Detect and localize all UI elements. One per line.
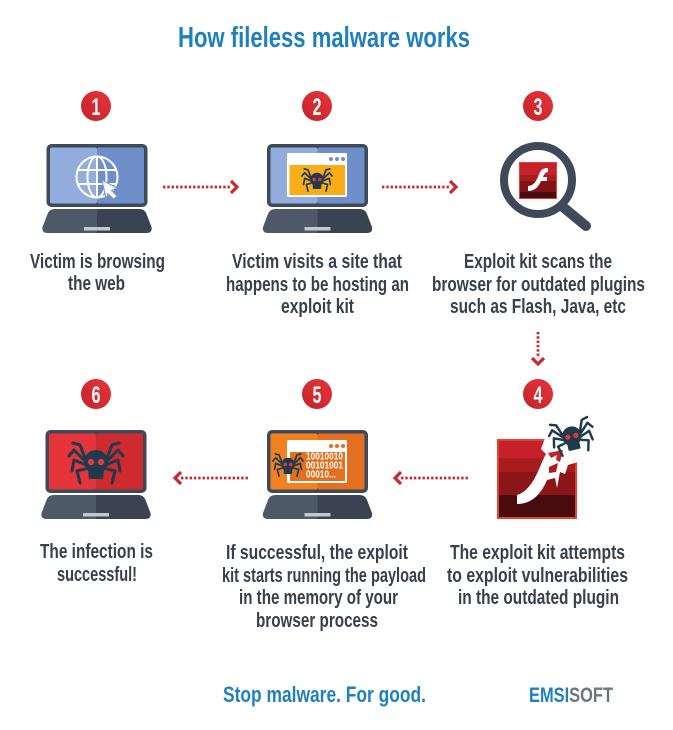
text: step 5: kit starts running the payload	[222, 565, 426, 587]
step 1 badge: 1	[92, 94, 100, 121]
step 2 badge: 2	[312, 94, 322, 121]
logo: Emsisoft: EMSISOFT	[529, 684, 613, 707]
step 5 badge: 5	[312, 382, 322, 409]
icon: laptop running payload: 10010010	[306, 452, 343, 462]
text: step 5: If successful, the exploit	[226, 542, 408, 564]
step 3 badge	[523, 91, 553, 121]
step 2 badge	[302, 91, 332, 121]
text: step 6: successful!	[57, 564, 137, 586]
text: step 1: Victim is browsing	[30, 251, 165, 273]
text: step 1	[30, 251, 165, 295]
arrow 1 to 2	[163, 181, 237, 193]
text: step 2: exploit kit	[281, 296, 354, 318]
text: step 3	[432, 251, 645, 318]
text: step 5: in the memory of your	[239, 587, 398, 609]
icon: laptop running payload: 00010...	[306, 470, 336, 480]
arrow 2 to 3	[382, 181, 456, 193]
step 6 badge	[81, 379, 111, 409]
step 4 badge: 4	[534, 382, 543, 409]
text: step 3: Exploit kit scans the	[464, 251, 612, 273]
icon: laptop infected with spider	[41, 430, 151, 519]
arrow 4 to 5	[395, 472, 468, 484]
icon: laptop with globe and cursor	[42, 144, 152, 233]
text: step 5: browser process	[256, 610, 378, 632]
text: step 4	[447, 542, 628, 609]
text: step 1: the web	[68, 273, 125, 295]
icon: laptop with spider site	[263, 144, 372, 233]
text: step 3: such as Flash, Java, etc	[450, 296, 626, 318]
text: step 2: Victim visits a site that	[232, 251, 402, 273]
title: How fileless malware works	[178, 22, 470, 54]
icon: laptop running payload: 00101001	[306, 460, 343, 472]
text: step 2	[226, 251, 409, 318]
text: step 5	[222, 542, 426, 632]
arrow 3 to 4	[532, 332, 544, 364]
text: step 6: The infection is	[40, 541, 153, 563]
text: step 2: happens to be hosting an	[226, 274, 409, 296]
step 4 badge	[523, 379, 553, 409]
step 6 badge: 6	[92, 382, 100, 409]
text: step 4: The exploit kit attempts	[450, 542, 625, 564]
text: step 6	[40, 541, 153, 586]
arrow 5 to 6	[175, 472, 248, 484]
icon: flash logo attacked by spider	[497, 416, 597, 519]
slogan: Stop malware. For good.	[223, 682, 426, 707]
text: step 4: to exploit vulnerabilities	[447, 565, 628, 587]
step 5 badge	[302, 379, 332, 409]
icon: magnifier over flash logo	[504, 146, 586, 226]
step 1 badge	[81, 91, 111, 121]
text: step 4: in the outdated plugin	[458, 587, 619, 609]
step 3 badge: 3	[534, 94, 542, 121]
icon: laptop running payload	[263, 430, 372, 519]
